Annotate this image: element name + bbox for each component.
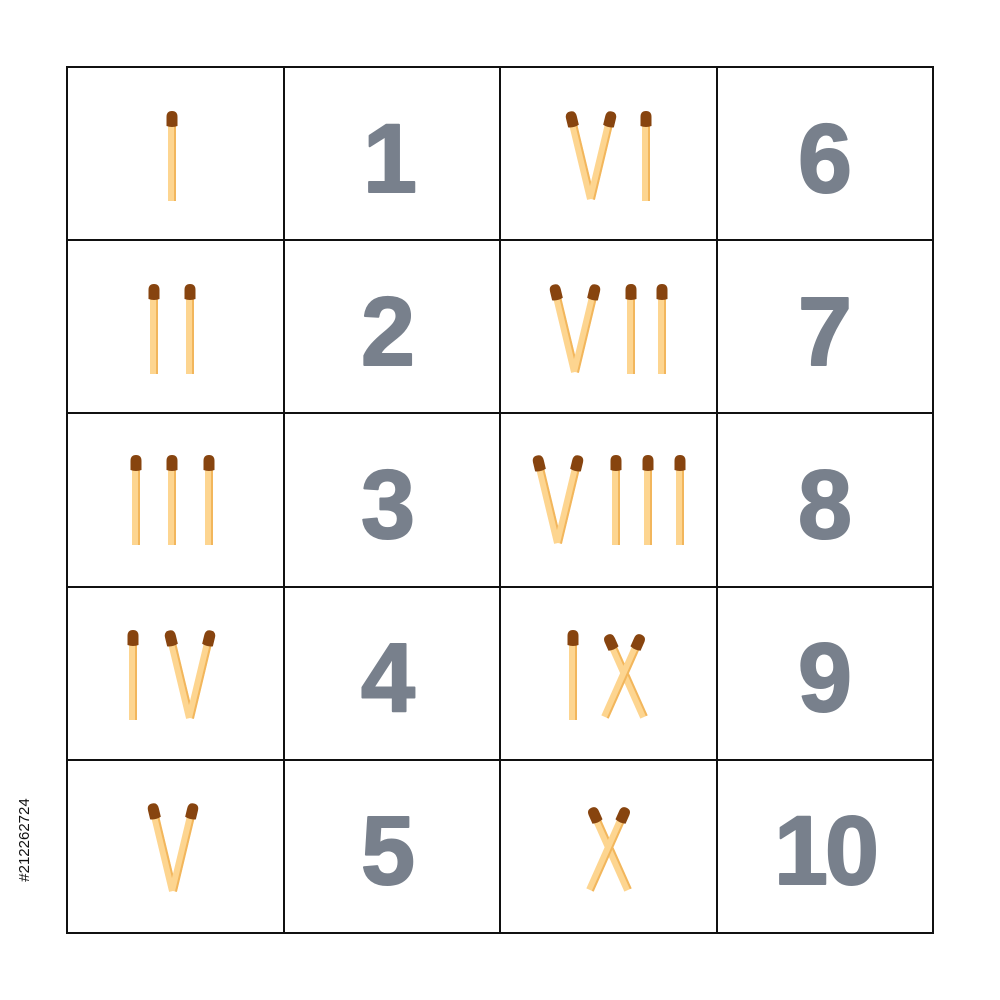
numerals column 2: 2	[361, 277, 415, 386]
numerals column 2: 4	[361, 623, 415, 732]
numerals column 4: 6	[798, 104, 852, 213]
numerals column 2: 3	[361, 450, 415, 559]
numerals column 2: 1	[363, 104, 417, 213]
numerals column 2: 5	[361, 796, 415, 905]
numerals column 2	[361, 104, 417, 905]
matches VIII	[532, 454, 686, 545]
numerals column 4: 10	[774, 796, 876, 905]
matches IX	[568, 630, 649, 720]
matches I	[166, 111, 178, 201]
side caption: #212262724	[16, 798, 33, 882]
matches IV	[128, 629, 216, 720]
matches V	[147, 802, 199, 892]
matches VII	[549, 283, 668, 374]
numerals column 4: 9	[798, 623, 852, 732]
matches II	[148, 284, 196, 374]
numerals column 4: 7	[798, 277, 852, 386]
matches VI	[565, 110, 652, 201]
grid	[67, 67, 933, 933]
matches X	[585, 806, 633, 892]
numerals column 4	[774, 104, 876, 905]
numerals column 4: 8	[798, 450, 852, 559]
matches III	[130, 455, 214, 545]
